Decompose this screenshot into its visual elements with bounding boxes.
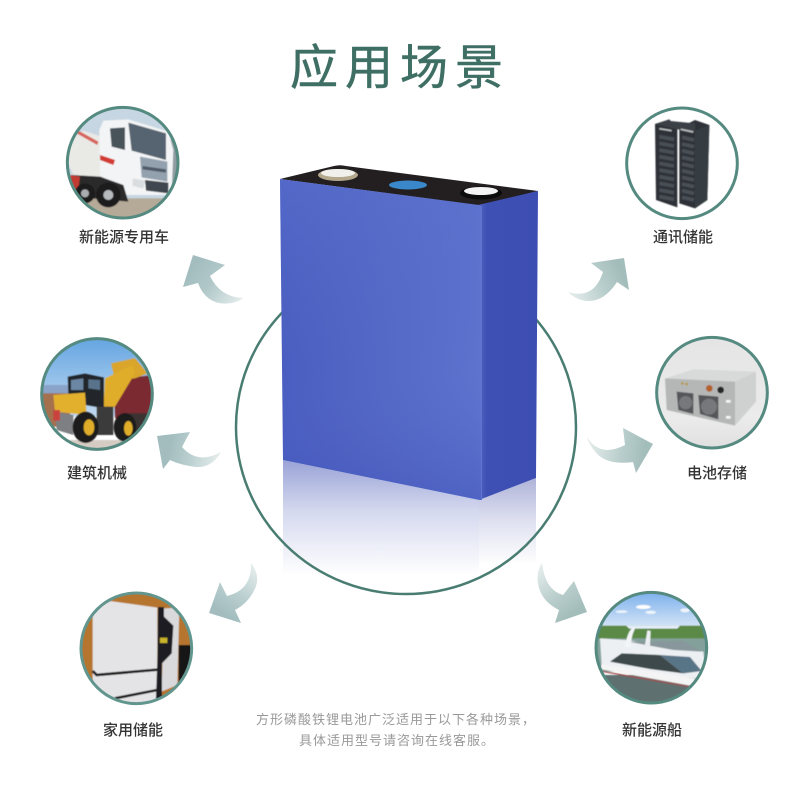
icon: truck photo — [66, 106, 180, 220]
icon: boat photo — [594, 590, 708, 704]
icon: home storage photo — [80, 592, 194, 706]
arrow: to storage — [587, 428, 653, 473]
label: home storage: 家用储能 — [103, 722, 163, 739]
label: loader: 建筑机械 — [67, 464, 127, 482]
battery top — [280, 165, 538, 206]
label: boat: 新能源船 — [622, 722, 682, 739]
right terminal — [460, 186, 502, 200]
footer note: 方形磷酸铁锂电池广泛适用于以下各种场景， — [256, 712, 536, 727]
label: truck: 新能源专用车 — [79, 229, 169, 246]
icon: loader photo — [40, 337, 154, 451]
footer note — [256, 712, 536, 748]
arrow: to loader — [157, 432, 221, 469]
vent — [389, 180, 427, 190]
arrow: to home — [209, 563, 257, 623]
left terminal — [318, 169, 358, 181]
arrow: to boat — [538, 563, 587, 623]
battery right side — [478, 191, 538, 500]
label: telecom: 通讯储能 — [653, 229, 713, 246]
label: storage: 电池存储 — [687, 465, 747, 482]
battery — [280, 165, 538, 500]
battery front — [280, 179, 482, 500]
battery front shading — [280, 179, 481, 500]
battery reflection — [283, 460, 536, 585]
footer note: 具体适用型号请咨询在线客服。 — [299, 733, 495, 748]
large ring behind battery — [236, 260, 576, 594]
title: 应用场景 — [290, 42, 510, 95]
icon: power storage photo — [655, 336, 769, 450]
icon: telecom rack photo — [627, 108, 737, 219]
arrow: to truck — [183, 255, 243, 304]
arrow: to telecom — [568, 258, 629, 301]
